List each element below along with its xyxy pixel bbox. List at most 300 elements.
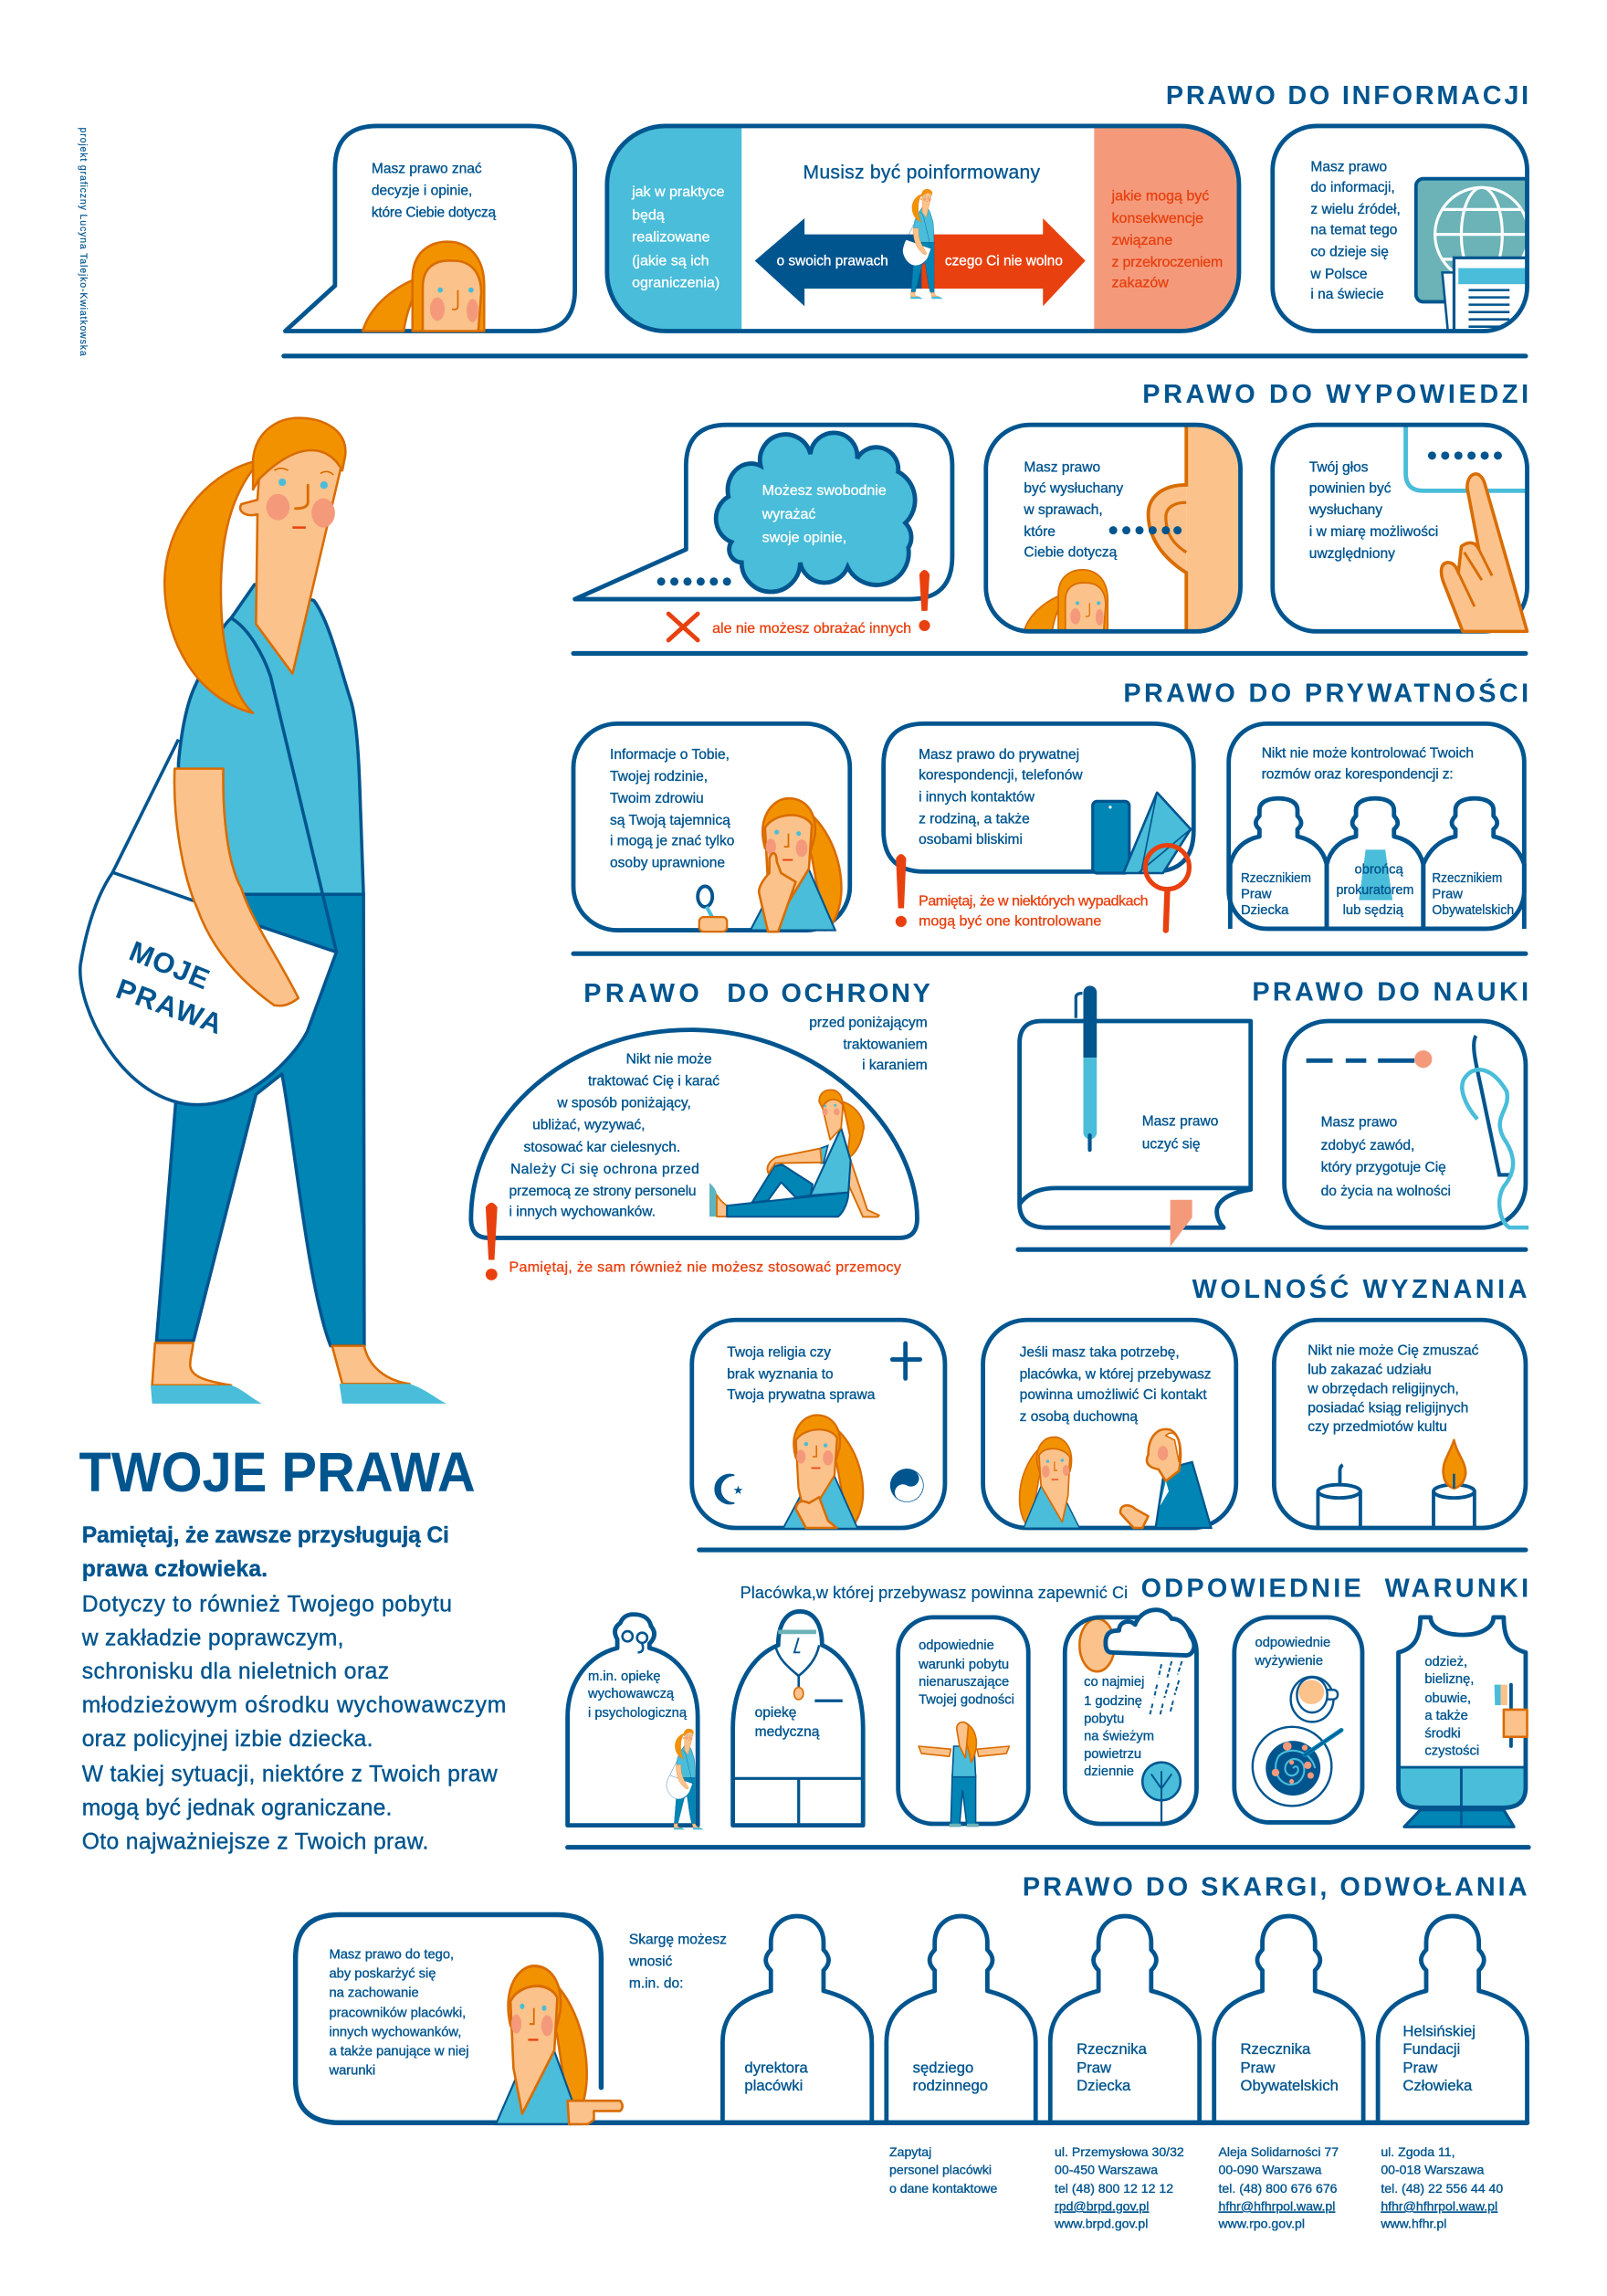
text: complaint can be filed: m.in. do: <box>629 1976 683 1992</box>
panel: educator and psychologist <box>568 1615 704 1829</box>
left column text: będą <box>632 207 665 224</box>
panel text: powietrzu <box>1084 1747 1141 1762</box>
panel text: obuwie, <box>1424 1691 1471 1706</box>
panel: your religion <box>692 1320 945 1529</box>
panel text: Nikt nie może Cię zmuszać <box>1308 1343 1479 1359</box>
panel text <box>372 161 496 220</box>
contact: helsinki foundation <box>1380 2144 1503 2231</box>
icon: pen <box>1076 985 1097 1150</box>
panel text: rozmów oraz korespondencji z: <box>1262 767 1454 783</box>
panel text: warunki pobytu <box>918 1658 1009 1672</box>
section heading: prawo do ochrony: PRAWO <box>583 979 699 1008</box>
warning text: Pamiętaj, że sam również nie możesz stosować przemocy <box>509 1259 901 1275</box>
arrow labels: czego Ci nie wolno <box>945 253 1063 269</box>
panel text: Masz prawo do tego, <box>329 1948 454 1963</box>
panel text <box>509 1052 719 1219</box>
text: the facility must provide: Placówka,w której przebywasz powinna zapewnić Ci <box>740 1584 1128 1602</box>
icon: cross <box>892 1343 920 1378</box>
panel text: do życia na wolności <box>1321 1184 1451 1199</box>
contact: civil rights ombudsman: tel. (48) 800 676 676 <box>1218 2181 1338 2196</box>
contact: civil rights ombudsman: www.rpo.gov.pl <box>1217 2217 1305 2231</box>
panel: no coercion <box>1274 1320 1526 1528</box>
intro text: schronisku dla nieletnich oraz <box>82 1659 389 1684</box>
panel text: z wielu źródeł, <box>1310 202 1401 217</box>
dots <box>1428 451 1502 459</box>
bust labels: Obywatelskich <box>1432 903 1514 918</box>
icon: toothbrush in hand <box>1495 1685 1528 1746</box>
panel text: placówka, w której przebywasz <box>1020 1366 1211 1382</box>
panel text: traktować Cię i karać <box>588 1074 719 1090</box>
bust labels: prokuratorem <box>1336 883 1413 898</box>
panel text <box>919 747 1083 848</box>
arrow: right, what is forbidden <box>921 218 1086 306</box>
contact: children's ombudsman: www.brpd.gov.pl <box>1054 2217 1148 2231</box>
intro text: mogą być jednak ograniczane. <box>82 1796 392 1820</box>
contact: ask staff: Zapytaj <box>889 2144 931 2159</box>
panel text: brak wyznania to <box>727 1366 834 1382</box>
intro text: młodzieżowym ośrodku wychowawczym <box>82 1693 506 1718</box>
icon: tie <box>1359 849 1392 900</box>
bag label <box>112 935 228 1041</box>
bust label: Fundacji <box>1402 2040 1460 2058</box>
contact: children's ombudsman: rpd@brpd.gov.pl <box>1055 2198 1149 2213</box>
panel text: Twoja prywatna sprawa <box>727 1387 876 1403</box>
contact: children's ombudsman: ul. Przemysłowa 30/32 <box>1055 2144 1184 2159</box>
title: TWOJE PRAWA <box>79 1441 476 1503</box>
left column text: (jakie są ich <box>632 252 709 269</box>
right column text: związane <box>1112 232 1172 248</box>
arrow labels <box>777 253 1063 269</box>
panel text: i na świecie <box>1310 287 1384 302</box>
contact: ask staff <box>889 2144 997 2196</box>
panel text: 1 godzinę <box>1084 1694 1142 1709</box>
panel text: co dzieje się <box>1310 245 1389 260</box>
panel text: korespondencji, telefonów <box>919 767 1083 783</box>
bust label <box>1241 2040 1339 2094</box>
right column text: zakazów <box>1112 274 1169 290</box>
panel text: z rodziną, a także <box>919 811 1030 827</box>
contact: helsinki foundation: tel. (48) 22 556 44 40 <box>1381 2181 1503 2196</box>
bust label: Obywatelskich <box>1241 2077 1339 2094</box>
panel text: Nikt nie może kontrolować Twoich <box>1262 745 1474 761</box>
panel text: uwzględniony <box>1309 546 1395 562</box>
icon: pointing hand <box>568 2101 623 2124</box>
priest <box>1120 1429 1211 1528</box>
panel: medical care <box>733 1611 863 1826</box>
panel text: odzież, <box>1424 1655 1467 1669</box>
intro text: oraz policyjnej izbie dziecka. <box>82 1727 373 1752</box>
icon: magnifier <box>698 886 727 932</box>
intro text: Oto najważniejsze z Twoich praw. <box>82 1829 428 1854</box>
arrow labels: o swoich prawach <box>777 253 888 269</box>
icon: rain <box>1150 1661 1182 1715</box>
intro text: Dotyczy to również Twojego pobytu <box>82 1592 452 1617</box>
icon: needle <box>1474 1036 1513 1174</box>
bust label: dyrektora <box>744 2059 809 2077</box>
bust label: Praw <box>1241 2059 1276 2077</box>
panel: right to know speech bubble <box>285 126 575 332</box>
small figure <box>903 189 943 299</box>
bust label: Człowieka <box>1402 2077 1473 2094</box>
panel text: uczyć się <box>1142 1137 1201 1153</box>
text: before degrading treatment: traktowaniem <box>843 1037 928 1052</box>
section heading: prawo do skargi: PRAWO DO SKARGI, ODWOŁANIA <box>1023 1873 1528 1902</box>
panel: fresh air <box>1065 1610 1196 1824</box>
figure with arms out <box>919 1722 1009 1826</box>
panel text: pobytu <box>1084 1711 1124 1726</box>
bust labels: obrońcą <box>1354 863 1404 878</box>
bust label <box>913 2059 988 2094</box>
contact: ask staff: o dane kontaktowe <box>889 2181 997 2196</box>
panel text <box>1023 459 1123 561</box>
section heading: prawo do prywatnosci: PRAWO DO PRYWATNOŚCI <box>1123 677 1528 708</box>
contact: civil rights ombudsman: Aleja Solidarności 77 <box>1218 2144 1339 2159</box>
panel text: medyczną <box>755 1724 820 1740</box>
panel text <box>1262 745 1474 783</box>
panel: clothing <box>1399 1617 1528 1827</box>
bust label: Helsińskiej <box>1402 2023 1476 2040</box>
cloud text: swoje opinie, <box>762 529 846 545</box>
text: complaint can be filed: wnosić <box>628 1954 673 1970</box>
panel text: ubliżać, wyzywać, <box>532 1118 646 1133</box>
icon: pin <box>1414 1050 1432 1068</box>
panel text <box>1255 1636 1330 1669</box>
panel text: wysłuchany <box>1308 502 1382 518</box>
panel text: w Polsce <box>1309 267 1368 282</box>
panel heading: Musisz być poinformowany <box>804 163 1040 184</box>
left column text: realizowane <box>632 229 710 246</box>
dashes <box>1307 1059 1414 1062</box>
panel text: wyżywienie <box>1255 1654 1323 1669</box>
contact: ask staff: personel placówki <box>889 2162 992 2176</box>
panel text: w sprawach, <box>1023 502 1103 518</box>
intro text: Pamiętaj, że zawsze przysługują Ci <box>82 1523 449 1548</box>
bust label: Dziecka <box>1077 2077 1131 2094</box>
section heading: prawo do ochrony <box>583 979 930 1008</box>
panel text <box>1307 1343 1479 1435</box>
text: complaint can be filed <box>628 1933 727 1992</box>
bust: family judge <box>887 1916 1035 2122</box>
panel text: odpowiednie <box>1255 1636 1330 1650</box>
cloud <box>716 433 915 592</box>
panel text: i mogą je znać tylko <box>610 834 734 849</box>
bust labels: Rzecznikiem <box>1432 871 1502 886</box>
panel text: Masz prawo <box>1310 160 1387 175</box>
panel text <box>1321 1114 1451 1199</box>
panel text: być wysłuchany <box>1024 481 1123 497</box>
text: complaint can be filed: Skargę możesz <box>629 1933 727 1948</box>
panel text: i psychologiczną <box>588 1706 688 1721</box>
author credit: projekt graficzny Lucyna Talejko-Kwiatkowska <box>78 128 89 356</box>
icon: phone <box>1093 801 1129 873</box>
panel: your voice should be heard <box>1273 425 1528 631</box>
icon: yin yang <box>890 1468 929 1508</box>
panel: book with pen <box>1020 985 1251 1247</box>
icon: unlit candle <box>1318 1465 1360 1528</box>
panel text: wychowawczą <box>587 1687 675 1701</box>
bust label: sędziego <box>913 2059 973 2077</box>
contact: children's ombudsman: tel (48) 800 12 12 12 <box>1055 2181 1173 2196</box>
dots <box>1109 526 1182 534</box>
text: before degrading treatment <box>809 1015 928 1073</box>
panel: nobody can control <box>1229 723 1524 929</box>
panel text: w sposób poniżający, <box>556 1096 691 1111</box>
panel text: Twoja religia czy <box>727 1344 831 1360</box>
panel text: posiadać ksiąg religijnych <box>1308 1400 1468 1416</box>
icon: red magnifier <box>1145 846 1189 931</box>
warning text: Pamiętaj, że w niektórych wypadkach <box>919 892 1149 909</box>
bust labels: Praw <box>1432 887 1463 901</box>
icon: lit candle <box>1434 1440 1475 1528</box>
panel text: na temat tego <box>1310 223 1397 238</box>
icon: envelope <box>1123 793 1191 873</box>
small figure <box>667 1729 704 1829</box>
bust label <box>1077 2040 1148 2094</box>
cyan hem <box>1399 1767 1526 1807</box>
panel: freedom of speech bubble <box>575 425 952 640</box>
panel text: opiekę <box>755 1705 796 1721</box>
panel text: które Ciebie dotyczą <box>372 205 496 220</box>
intro text <box>81 1523 506 1854</box>
icon: exclamation <box>919 570 930 631</box>
panel text <box>1142 1114 1218 1153</box>
contact: children's ombudsman: 00-450 Warszawa <box>1055 2162 1158 2176</box>
icon: exclamation <box>486 1203 498 1280</box>
panel text: Masz prawo <box>1321 1114 1397 1131</box>
icon: crescent and star <box>715 1474 743 1504</box>
section heading: prawo do nauki: PRAWO DO NAUKI <box>1252 978 1528 1007</box>
panel: nutrition <box>1234 1617 1362 1822</box>
panel: private correspondence <box>884 723 1193 931</box>
thread <box>1462 1069 1528 1227</box>
section heading: prawo do ochrony: DO OCHRONY <box>727 979 930 1008</box>
bust label: Praw <box>1077 2059 1112 2077</box>
left column text <box>631 184 725 290</box>
panel text <box>610 747 734 871</box>
panel text <box>1020 1344 1211 1425</box>
bust labels: Dziecka <box>1241 903 1289 918</box>
panel text: które <box>1024 524 1056 540</box>
panel text: który przygotuje Cię <box>1321 1160 1446 1175</box>
cloud text: wyrażać <box>761 506 815 522</box>
panel text <box>755 1705 820 1740</box>
bust label: rodzinnego <box>913 2077 988 2094</box>
panel text: i innych kontaktów <box>919 789 1035 805</box>
bust label: placówki <box>744 2077 803 2094</box>
panel text: i innych wychowanków. <box>509 1204 656 1219</box>
panel: dignified conditions <box>898 1617 1028 1826</box>
contact: civil rights ombudsman: 00-090 Warszawa <box>1218 2162 1322 2176</box>
panel text: do informacji, <box>1310 180 1395 195</box>
contact: helsinki foundation: 00-018 Warszawa <box>1381 2162 1484 2176</box>
panel text <box>328 1948 469 2078</box>
icon: cup and saucer <box>1291 1677 1338 1722</box>
panel text: z osobą duchowną <box>1020 1409 1138 1425</box>
panel text <box>587 1669 688 1721</box>
right column text: z przekroczeniem <box>1112 254 1223 270</box>
text: before degrading treatment: przed poniżającym <box>809 1015 928 1030</box>
panel text: Twoim zdrowiu <box>610 791 704 806</box>
bag label: MOJE <box>125 935 215 995</box>
bust labels: lub sędzią <box>1343 903 1404 918</box>
icon: crescent and star: ★ <box>733 1483 743 1497</box>
panel text: Informacje o Tobie, <box>610 747 730 763</box>
icon: cloud <box>1106 1610 1194 1656</box>
panel text: Masz prawo <box>1024 459 1100 476</box>
bust label: Praw <box>1402 2059 1438 2077</box>
panel: protection dome <box>471 1030 917 1280</box>
panel text: na zachowanie <box>329 1985 419 2000</box>
cloud text <box>761 482 887 545</box>
panel text: powinna umożliwić Ci kontakt <box>1020 1387 1207 1403</box>
panel text: osoby uprawnione <box>610 856 725 871</box>
section heading: odpowiednie warunki: ODPOWIEDNIE WARUNKI <box>1141 1574 1528 1603</box>
section heading: prawo do wypowiedzi: PRAWO DO WYPOWIEDZI <box>1142 380 1528 409</box>
warning text: mogą być one kontrolowane <box>919 913 1101 930</box>
panel text <box>1424 1655 1479 1759</box>
panel text: bieliznę, <box>1424 1672 1474 1687</box>
panel text <box>1308 459 1438 562</box>
girl <box>496 1966 587 2124</box>
panel text: lub zakazać udziału <box>1308 1363 1432 1378</box>
panel text: Twojej rodzinie, <box>610 769 708 785</box>
left column text: jak w praktyce <box>631 184 725 200</box>
panel text <box>1084 1675 1154 1779</box>
panel text: Masz prawo do prywatnej <box>919 747 1079 763</box>
panel text: powinien być <box>1309 481 1392 497</box>
stand <box>1404 1810 1514 1827</box>
panel text: nienaruszające <box>919 1675 1009 1690</box>
bust label <box>1402 2023 1476 2094</box>
panel text: co najmiej <box>1084 1675 1144 1690</box>
panel text: m.in. opiekę <box>588 1669 660 1684</box>
panel text: są Twoją tajemnicą <box>610 813 730 828</box>
section heading: prawo do informacji: PRAWO DO INFORMACJI <box>1166 81 1528 111</box>
warning text <box>919 892 1149 930</box>
text: before degrading treatment: i karaniem <box>862 1058 928 1073</box>
panel text: a także panujące w niej <box>329 2044 469 2059</box>
bust: civil rights ombudsman <box>1214 1916 1363 2122</box>
busts <box>1230 798 1524 929</box>
bag label: PRAWA <box>112 973 228 1041</box>
bust label <box>744 2059 809 2094</box>
icon: newspaper <box>1441 256 1525 329</box>
panel: contact with clergy <box>983 1320 1236 1528</box>
contact: helsinki foundation: ul. Zgoda 11, <box>1381 2144 1455 2159</box>
dots <box>657 577 731 585</box>
panel: right to be heard <box>986 425 1241 631</box>
panel text: Nikt nie może <box>626 1052 712 1068</box>
panel: access to information <box>1270 124 1529 333</box>
icon: tree <box>1142 1763 1181 1824</box>
panel text <box>1309 160 1401 302</box>
panel text: Twój głos <box>1309 459 1369 476</box>
contact: helsinki foundation: www.hfhr.pl <box>1380 2217 1446 2231</box>
bust: director <box>722 1916 872 2122</box>
panel text: Twojej godności <box>919 1692 1014 1707</box>
intro text: w zakładzie poprawczym, <box>81 1626 343 1650</box>
contact: children's ombudsman <box>1054 2144 1184 2231</box>
icon: sun <box>1079 1618 1115 1671</box>
icon: glasses <box>623 1631 647 1652</box>
icon: plate with soup <box>1253 1727 1341 1806</box>
panel text: osobami bliskimi <box>919 832 1023 848</box>
arrow: left, about your rights <box>755 218 924 306</box>
icon: bookmark <box>1171 1200 1192 1247</box>
panel: information about you <box>573 723 850 932</box>
intro text: W takiej sytuacji, niektóre z Twoich praw <box>82 1762 498 1787</box>
right column text: konsekwencje <box>1112 210 1203 226</box>
bust labels: Rzecznikiem <box>1241 871 1311 886</box>
warning text: ale nie możesz obrażać innych <box>712 620 911 637</box>
icon: stethoscope <box>775 1632 819 1700</box>
panel text: na świeżym <box>1084 1730 1154 1744</box>
icon: hand pointing up <box>1442 474 1528 631</box>
sitting girl <box>709 1090 879 1216</box>
right column text: jakie mogą być <box>1111 188 1209 205</box>
icon: exclamation <box>896 854 907 927</box>
panel text: środki <box>1424 1726 1461 1741</box>
panel text: Masz prawo <box>1142 1114 1218 1130</box>
panel text: a także <box>1424 1709 1468 1723</box>
panel text: dziennie <box>1084 1764 1134 1779</box>
right column text <box>1111 188 1223 290</box>
panel text <box>918 1638 1014 1707</box>
panel text: zdobyć zawód, <box>1321 1138 1414 1153</box>
panel text: Należy Ci się ochrona przed <box>510 1162 699 1177</box>
panel text: innych wychowanków, <box>329 2026 461 2040</box>
panel text <box>727 1344 876 1403</box>
panel text: Jeśli masz taka potrzebę, <box>1020 1344 1180 1360</box>
panel: must be informed <box>607 126 1239 332</box>
panel text: czystości <box>1424 1744 1479 1759</box>
panel text: decyzje i opinie, <box>372 183 472 198</box>
section heading: wolnosc wyznania: WOLNOŚĆ WYZNANIA <box>1192 1273 1528 1304</box>
panel text: Masz prawo znać <box>372 161 482 176</box>
girl with hand on chest <box>783 1415 863 1529</box>
bust label: Rzecznika <box>1241 2040 1311 2058</box>
bust labels <box>1241 863 1514 918</box>
main figure: woman with bag <box>80 418 446 1404</box>
girl <box>1020 1438 1079 1528</box>
intro text: prawa człowieka. <box>82 1557 268 1582</box>
panel text: warunki <box>328 2063 375 2078</box>
panel text: w obrzędach religijnych, <box>1307 1381 1459 1396</box>
left column text: ograniczenia) <box>632 274 719 290</box>
contact: helsinki foundation: hfhr@hfhrpol.waw.pl <box>1381 2198 1497 2213</box>
panel: right to complain <box>296 1914 1528 2124</box>
panel text: przemocą ze strony personelu <box>509 1184 697 1199</box>
bust: helsinki foundation <box>1378 1916 1528 2122</box>
panel text: stosować kar cielesnych. <box>524 1140 680 1155</box>
panel text: Ciebie dotyczą <box>1024 545 1118 561</box>
bust: children's ombudsman <box>1050 1916 1200 2122</box>
bust labels: Praw <box>1241 887 1272 901</box>
panel text: aby poskarżyć się <box>329 1966 436 1981</box>
panel text: czy przedmiotów kultu <box>1308 1419 1447 1435</box>
contact: civil rights ombudsman <box>1217 2144 1339 2231</box>
bust label: Rzecznika <box>1077 2040 1148 2058</box>
icon: red cross <box>668 614 698 640</box>
panel text: i w miarę możliwości <box>1309 524 1438 540</box>
panel: vocational training <box>1285 1021 1528 1227</box>
panel text: pracowników placówki, <box>329 2006 466 2021</box>
girl shushing <box>751 798 841 932</box>
cloud text: Możesz swobodnie <box>762 482 887 499</box>
panel text: odpowiednie <box>919 1638 994 1653</box>
contact: civil rights ombudsman: hfhr@hfhrpol.waw.pl <box>1218 2198 1335 2213</box>
icon: monitor with globe <box>1413 177 1525 303</box>
